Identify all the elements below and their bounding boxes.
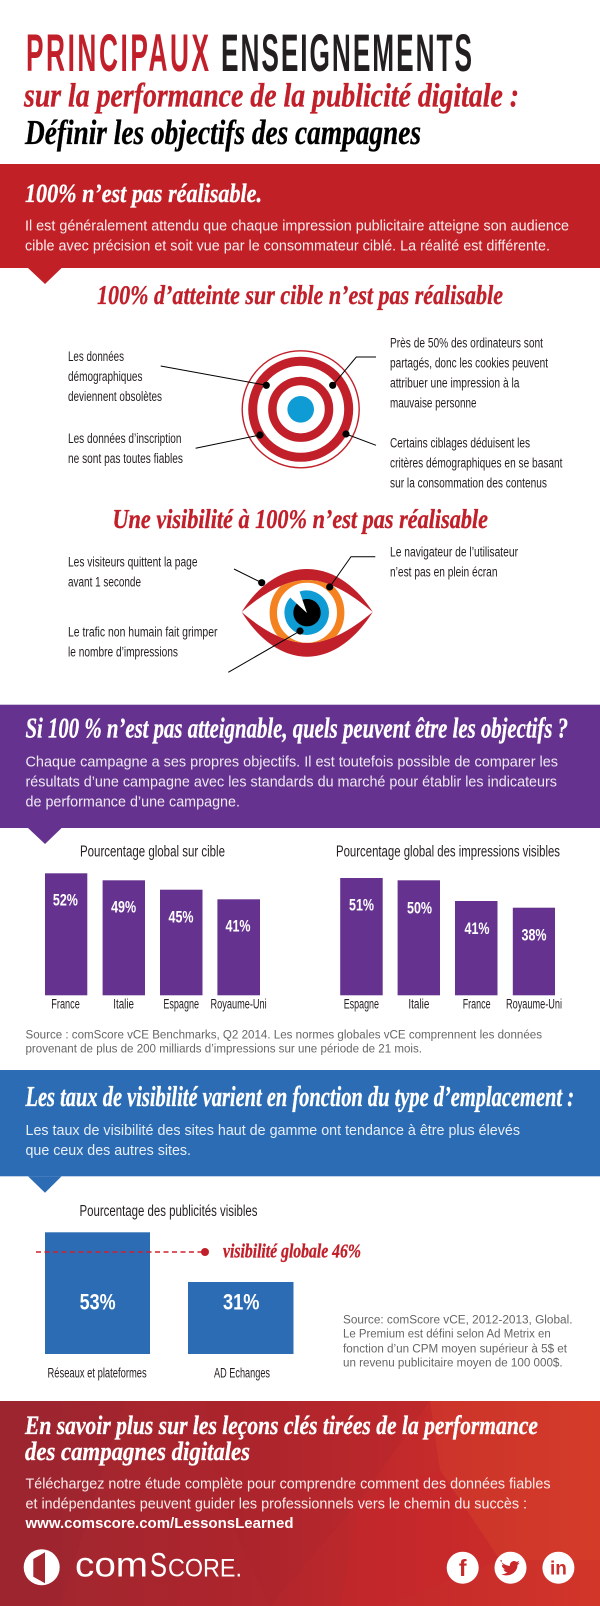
bar exchanges: 31% [223, 1289, 260, 1314]
bar premium [45, 1232, 150, 1354]
icon: facebook [447, 1552, 479, 1584]
bar France [45, 873, 87, 995]
source note: provenant de plus de 200 milliards d’impressions sur une période de 21 mois. [26, 1044, 422, 1056]
target diagram [161, 351, 376, 468]
bar Royaume-Uni [513, 908, 555, 995]
target label: demographics: Les données [68, 349, 124, 364]
bar Royaume-Uni [217, 899, 260, 995]
title line 1: PRINCIPAUX [26, 23, 209, 82]
icon: linkedin: in [550, 1558, 567, 1580]
bar Espagne [160, 890, 202, 995]
axis labels [344, 997, 562, 1012]
target label: shared computers: mauvaise personne [390, 396, 476, 411]
logo wordmark [75, 1546, 242, 1585]
eye label: visitors: avant 1 seconde [68, 575, 141, 590]
band text: Chaque campagne a ses propres objectifs. Il est toutefois possible de comparer les [26, 755, 558, 771]
source note: fonction d’un CPM moyen supérieur à 5$ et [343, 1343, 568, 1355]
eye label: non human traffic [68, 625, 218, 660]
eye label: visitors [68, 555, 198, 590]
heading: target: 100% d’atteinte sur cible n’est pas réalisable [97, 280, 503, 310]
chart title: Pourcentage des publicités visibles [80, 1203, 258, 1220]
callout lines [228, 557, 375, 672]
eye label: browser [390, 545, 518, 580]
bar Espagne [340, 878, 383, 995]
axis labels: Italie [408, 997, 429, 1012]
axis labels: Italie [113, 997, 134, 1012]
axis labels: AD Echanges [214, 1366, 270, 1381]
eye label: non human traffic: le nombre d’impressions [68, 645, 178, 660]
source note: Source : comScore vCE Benchmarks, Q2 2014. Les normes globales vCE comprennent les données [26, 1029, 542, 1041]
average line [36, 1248, 209, 1256]
callout dots [258, 579, 333, 635]
axis labels: France [463, 997, 491, 1012]
eye label: browser: Le navigateur de l’utilisateur [390, 545, 518, 560]
panel: red intro band [0, 164, 600, 284]
source note: un revenu publicitaire moyen de 100 000$. [343, 1358, 563, 1370]
footer heading: des campagnes digitales [25, 1437, 250, 1466]
axis labels: Espagne [344, 997, 379, 1012]
panel: blue band [0, 1070, 600, 1193]
callout dots [256, 382, 350, 439]
footer text: et indépendantes peuvent guider les professionnels vers le chemin du succès : [26, 1497, 527, 1513]
bar France: 52% [53, 891, 78, 910]
average label: visibilité globale 46% [223, 1241, 361, 1263]
bar Espagne: 45% [168, 907, 194, 926]
bar Italie [398, 880, 440, 995]
logo wordmark: com [75, 1546, 148, 1585]
icon: facebook: f [459, 1555, 467, 1581]
heading: visibility: Une visibilité à 100% n’est pas réalisable [112, 504, 488, 534]
target label: registration [68, 431, 183, 466]
bar chart: on target [45, 844, 267, 1012]
bar premium: 53% [80, 1289, 116, 1314]
axis labels: Espagne [163, 997, 199, 1012]
target label: shared computers [390, 336, 548, 411]
target label: shared computers: attribuer une impression à la [390, 376, 520, 391]
band text: Il est généralement attendu que chaque impression publicitaire atteigne son audience [25, 219, 569, 235]
glint [289, 590, 307, 613]
bar Italie: 49% [111, 897, 136, 916]
title [23, 23, 519, 152]
footer text [24, 1477, 550, 1532]
title line 1 dark: ENSEIGNEMENTS [221, 23, 472, 82]
pupil [293, 599, 321, 626]
panel: purple band [0, 705, 600, 844]
bar Italie [103, 880, 145, 995]
bar Italie: 50% [407, 898, 432, 917]
eye label: non human traffic: Le trafic non humain fait grimper [68, 625, 218, 640]
target label: registration: Les données d’inscription [68, 431, 182, 446]
axis labels [51, 997, 267, 1012]
eye label: visitors: Les visiteurs quittent la page [68, 555, 198, 570]
iris ring [273, 579, 341, 646]
bar exchanges [188, 1282, 294, 1354]
axis labels [48, 1366, 270, 1381]
target label: shared computers: partagés, donc les cookies peuvent [390, 356, 548, 371]
band text [26, 755, 558, 811]
eye diagram [228, 557, 375, 672]
iris [284, 590, 329, 635]
footer heading [24, 1411, 538, 1466]
band text [25, 219, 569, 255]
target centre [287, 396, 314, 423]
target label: shared computers: Près de 50% des ordinateurs sont [390, 336, 543, 351]
axis labels: Royaume-Uni [506, 997, 562, 1012]
logo icon [24, 1549, 60, 1585]
eye label: browser: n’est pas en plein écran [390, 565, 498, 580]
bar Espagne: 51% [349, 896, 374, 915]
footer text: www.comscore.com/LessonsLearned [24, 1516, 294, 1532]
bar chart: visible ads [36, 1203, 361, 1381]
axis labels: France [51, 997, 80, 1012]
target label: demographics: démographiques [68, 369, 143, 384]
bar France [455, 901, 498, 995]
band heading: 100% n’est pas réalisable. [25, 179, 262, 208]
source note: Le Premium est défini selon Ad Metrix en [343, 1329, 551, 1341]
target label: inferred targeting: Certains ciblages déduisent les [390, 436, 530, 451]
bar France: 41% [464, 919, 490, 938]
target label: inferred targeting: sur la consommation des contenus [390, 476, 547, 491]
logo wordmark: S [150, 1547, 167, 1585]
chart title: Pourcentage global sur cible [80, 844, 225, 861]
axis labels: Réseaux et plateformes [48, 1366, 147, 1381]
callout lines [161, 357, 376, 448]
source note [343, 1314, 572, 1370]
target label: demographics: deviennent obsolètes [68, 389, 162, 404]
icon: twitter [494, 1552, 526, 1584]
target label: inferred targeting [390, 436, 563, 491]
bar Royaume-Uni: 38% [522, 925, 546, 944]
source note [26, 1029, 542, 1056]
band text: résultats d’une campagne avec les standards du marché pour établir les indicateurs [26, 775, 557, 791]
bar Royaume-Uni: 41% [226, 917, 250, 936]
footer text: Téléchargez notre étude complète pour comprendre comment des données fiables [26, 1477, 550, 1493]
band text [26, 1123, 520, 1159]
band text: Les taux de visibilité des sites haut de gamme ont tendance à être plus élevés [26, 1123, 520, 1139]
logo wordmark: CORE. [168, 1555, 242, 1583]
band text: que ceux des autres sites. [26, 1143, 191, 1159]
target label: demographics [68, 349, 162, 404]
panel: footer [0, 1401, 600, 1606]
band text: cible avec précision et soit vue par le consommateur ciblé. La réalité est différente. [25, 239, 550, 255]
subtitle black: Définir les objectifs des campagnes [24, 113, 421, 152]
target label: registration: ne sont pas toutes fiables [68, 451, 183, 466]
bar chart: viewable [336, 844, 562, 1012]
icon: linkedin [542, 1552, 574, 1584]
source note: Source: comScore vCE, 2012-2013, Global. [343, 1314, 572, 1326]
axis labels: Royaume-Uni [210, 997, 267, 1012]
band text: de performance d’une campagne. [26, 795, 240, 811]
